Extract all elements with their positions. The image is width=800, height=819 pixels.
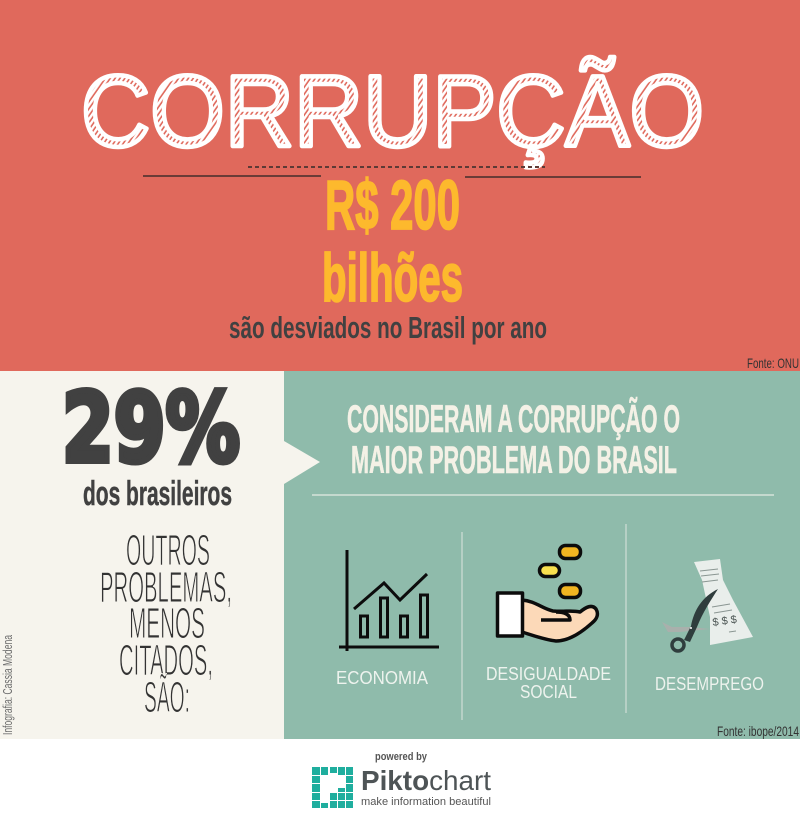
subtitle: são desviados no Brasil por ano (229, 310, 547, 345)
dashed divider (248, 166, 545, 168)
footer: piktochart branding (0, 739, 800, 819)
handwritten text: CITADOS, (119, 636, 213, 685)
icon: scissors cutting receipt (662, 559, 753, 651)
handwritten text: SÃO: (144, 672, 190, 722)
powered by: powered by (375, 751, 428, 763)
icon: hand with coins (498, 546, 597, 641)
right rule (465, 176, 641, 178)
percentage caption: dos brasileiros (83, 475, 232, 513)
label: economia: ECONOMIA (336, 668, 428, 688)
label: desemprego: DESEMPREGO (655, 674, 764, 694)
handwritten text: OUTROS (126, 526, 210, 575)
author credit: Infografia: Cassia Modena (0, 635, 15, 735)
big percentage: 29% (62, 374, 240, 484)
amount unit: bilhões (322, 240, 463, 316)
tagline: make information beautiful (361, 796, 491, 808)
logo mark (312, 767, 353, 808)
label: desigualdade social: DESIGUALDADE (486, 664, 611, 684)
panel: beige statistic: PROBLEMAS, (100, 563, 232, 612)
panel: beige statistic (0, 371, 284, 739)
panel: red header (0, 0, 800, 371)
label: desigualdade social (486, 664, 611, 702)
title: CORRUPÇÃO (81, 56, 704, 168)
panel: teal findings (284, 371, 800, 739)
amount: R$ 200 (325, 166, 460, 244)
handwritten text: MENOS (129, 599, 205, 648)
left rule (143, 175, 321, 177)
handwritten text (100, 526, 232, 722)
wordmark: Piktochart (361, 765, 491, 796)
icon: economy chart (339, 550, 439, 651)
heading (347, 397, 680, 482)
label: desigualdade social: SOCIAL (520, 682, 577, 702)
icon: scissors cutting receipt: $ $ $ (712, 614, 738, 629)
arrow (284, 441, 320, 484)
